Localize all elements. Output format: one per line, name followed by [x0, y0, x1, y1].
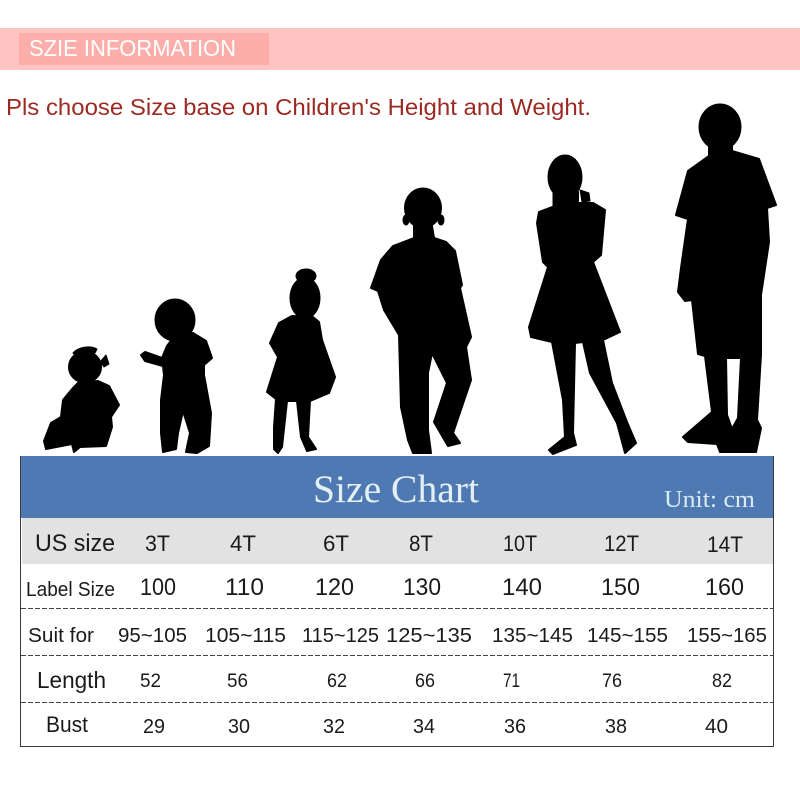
icon: small girl silhouette	[267, 270, 335, 453]
icon: tall boy silhouette	[676, 104, 776, 452]
row: label size: 160	[705, 574, 744, 601]
row: length: 56	[227, 671, 248, 692]
row: label size	[26, 574, 744, 601]
table frame	[20, 456, 774, 746]
row: bust: 29	[143, 716, 165, 738]
icon: toddler silhouette	[141, 300, 212, 453]
row: suit for: 145~155	[587, 625, 668, 647]
banner: size information: SZIE INFORMATION	[29, 35, 236, 61]
row: bust	[46, 712, 728, 738]
row: suit for: 115~125	[302, 625, 379, 647]
row: length: 62	[327, 671, 347, 692]
table header: size chart	[20, 456, 774, 518]
row: US size: 6T	[323, 531, 349, 556]
silhouettes: children by height	[44, 104, 776, 454]
row: length: 82	[712, 671, 732, 692]
row: US size: 14T	[707, 532, 743, 557]
table header: size chart: Unit: cm	[664, 487, 755, 513]
row: bust: Bust	[46, 712, 88, 737]
row: length: 66	[415, 671, 435, 692]
row: US size: 4T	[230, 531, 256, 556]
row: bust: 34	[413, 716, 435, 738]
row: US size	[22, 518, 773, 564]
icon: sitting baby silhouette	[44, 347, 119, 452]
table header: size chart: Size Chart	[313, 468, 479, 511]
row: label size: 120	[315, 574, 354, 601]
row: bust: 38	[605, 716, 627, 738]
row: bust: 40	[705, 716, 728, 738]
icon: boy silhouette	[371, 188, 471, 453]
instruction text: Pls choose Size base on Children's Height and Weight.	[6, 94, 591, 120]
row: suit for: 105~115	[205, 625, 286, 647]
row: US size: 8T	[409, 531, 433, 556]
row: length: Length	[37, 667, 106, 693]
row: length	[37, 667, 732, 693]
row: bust: 32	[323, 716, 345, 738]
row: suit for: 135~145	[492, 625, 573, 647]
row: length: 71	[503, 671, 520, 692]
row: bust: 36	[504, 716, 526, 738]
row: label size: 130	[403, 574, 441, 601]
row: label size: 140	[502, 574, 542, 601]
banner: size information	[0, 28, 800, 70]
row: label size: Label Size	[26, 579, 115, 601]
row: suit for: 155~165	[687, 625, 767, 647]
icon: girl in dress silhouette	[529, 156, 636, 454]
row: suit for	[28, 625, 767, 647]
row: label size: 110	[225, 574, 264, 601]
row: bust: 30	[228, 716, 250, 738]
size chart table	[20, 456, 774, 746]
row: suit for: Suit for	[28, 625, 94, 647]
row: US size: 3T	[145, 531, 170, 556]
row: label size: 150	[601, 574, 640, 601]
row: length: 76	[602, 671, 622, 692]
row: label size: 100	[140, 574, 176, 601]
row: suit for: 95~105	[118, 625, 187, 647]
row: US size: 12T	[604, 531, 639, 556]
row: suit for: 125~135	[386, 625, 472, 647]
row: length: 52	[140, 671, 161, 692]
row: US size: 10T	[503, 531, 537, 556]
row: US size: US size	[35, 530, 115, 557]
